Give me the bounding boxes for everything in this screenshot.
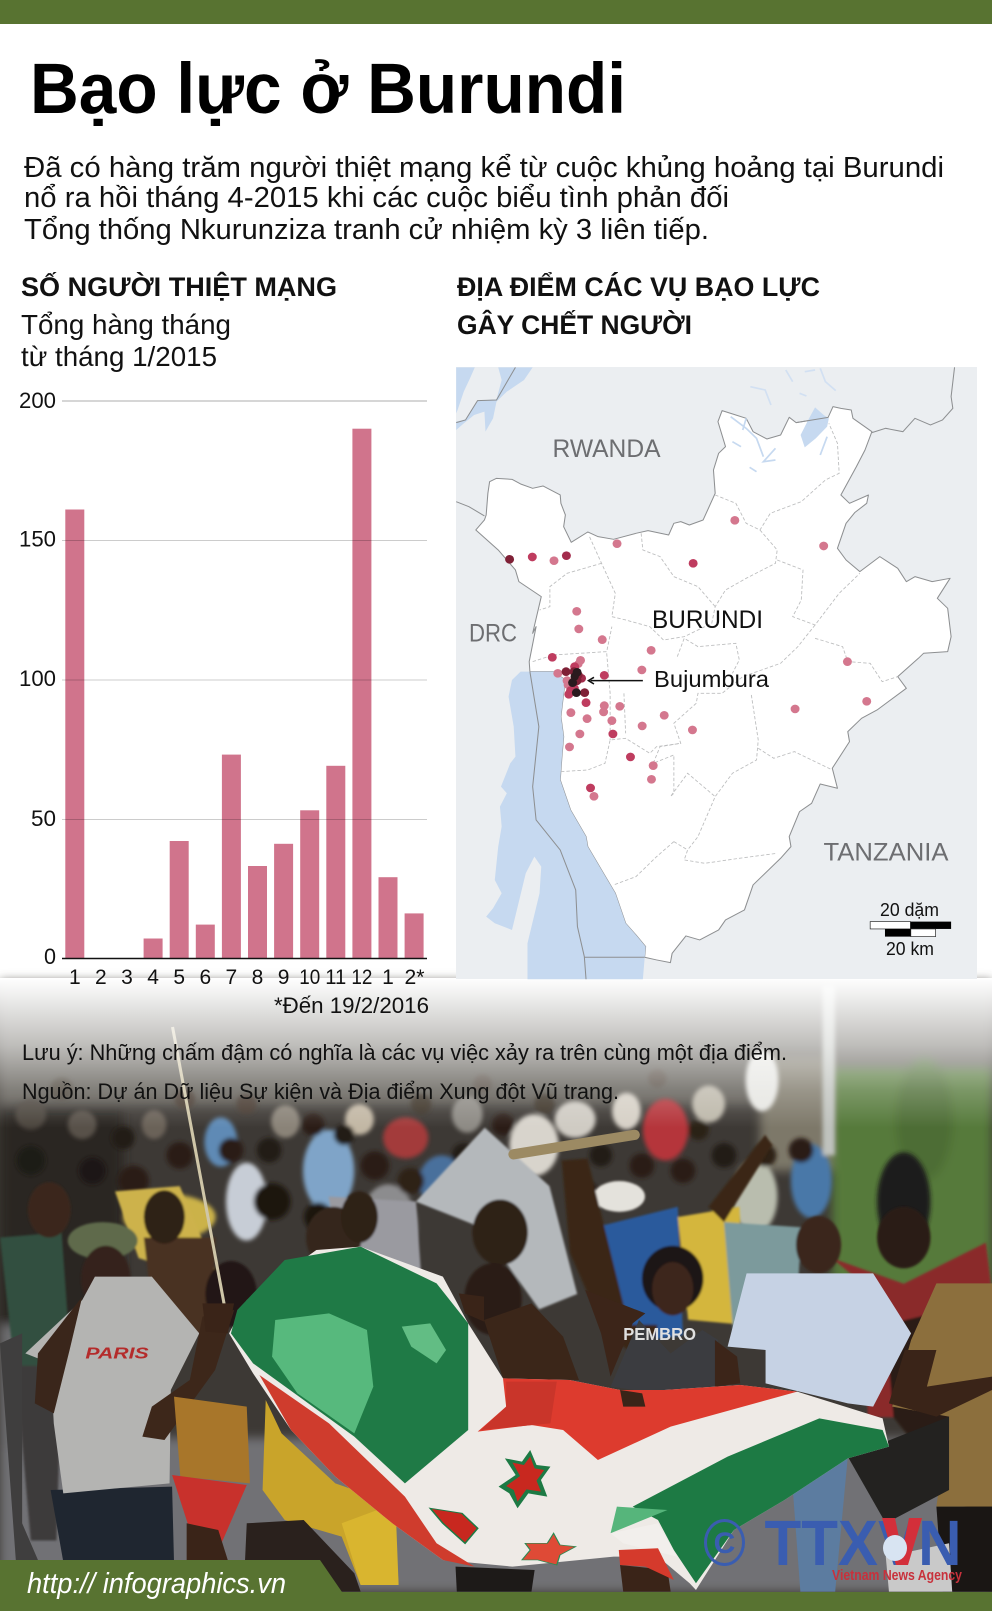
- map labels: [469, 435, 949, 959]
- title: Bạo lực ở Burundi: [30, 50, 626, 129]
- bar chart: monthly deaths: 12: [351, 966, 372, 989]
- bar chart: monthly deaths: 6: [199, 966, 211, 989]
- map labels: 20 km: [886, 938, 934, 959]
- bar chart: monthly deaths: 0: [44, 944, 56, 969]
- note and source: Nguồn: Dự án Dữ liệu Sự kiện và Địa điểm Xung đột Vũ trang.: [22, 1079, 619, 1104]
- bar chart: monthly deaths: 8: [252, 966, 263, 989]
- scale bar graphic: [870, 922, 951, 937]
- bar chart: monthly deaths: 7: [226, 966, 237, 989]
- bar chart: monthly deaths: 2: [95, 966, 107, 989]
- map labels: 20 dặm: [880, 899, 939, 920]
- top green bar: [0, 0, 992, 24]
- incident dots: [505, 516, 871, 801]
- footnote: date: *Đến 19/2/2016: [274, 993, 429, 1018]
- bar chart: monthly deaths: 3: [121, 966, 133, 989]
- map labels: RWANDA: [552, 435, 661, 463]
- bar chart: monthly deaths: 100: [19, 666, 56, 691]
- blurred crowd: [15, 986, 930, 1270]
- intro text: Đã có hàng trăm người thiệt mạng kể từ cuộc khủng hoảng tại Burundi: [24, 152, 944, 184]
- bar chart: monthly deaths: 5: [173, 966, 185, 989]
- bar chart: monthly deaths: 11: [325, 966, 346, 989]
- bar chart: monthly deaths: 50: [31, 806, 56, 831]
- shield and foreground crowd: [0, 1128, 992, 1540]
- bar chart: monthly deaths: 1: [69, 966, 81, 989]
- Burundi territory: [476, 407, 951, 963]
- bar chart: monthly deaths: 1: [382, 966, 394, 989]
- note and source: [22, 1040, 787, 1104]
- map labels: TANZANIA: [824, 838, 949, 866]
- white fade over photo top: [0, 978, 992, 1128]
- bar chart: monthly deaths: 150: [19, 526, 56, 552]
- note and source: Lưu ý: Những chấm đậm có nghĩa là các vụ việc xảy ra trên cùng một địa điểm.: [22, 1040, 787, 1065]
- foreground flag and runners: PEMBRO: [623, 1324, 696, 1344]
- heading: map: [457, 271, 820, 340]
- stick and branch: [173, 1027, 635, 1325]
- heading: map: GÂY CHẾT NGƯỜI: [457, 309, 692, 340]
- map panel: [456, 367, 977, 979]
- northern lake and rivers in Burundi: [801, 407, 829, 447]
- TTXVN logo: C: [714, 1527, 735, 1560]
- heading: death toll: SỐ NGƯỜI THIỆT MẠNG: [21, 270, 337, 302]
- bar chart: monthly deaths: 2*: [404, 966, 424, 989]
- bar chart: monthly deaths: [19, 388, 427, 989]
- foreground flag and runners: PARIS: [85, 1344, 149, 1362]
- map labels: DRC: [469, 620, 517, 648]
- northern streams outside Burundi: [750, 368, 836, 405]
- heading: map: ĐỊA ĐIỂM CÁC VỤ BẠO LỰC: [457, 271, 820, 302]
- foreground flag and runners: [0, 1247, 992, 1592]
- TTXVN logo: [706, 1507, 963, 1584]
- intro text: [24, 152, 944, 246]
- bar chart: monthly deaths: 9: [278, 966, 289, 989]
- website url: http:// infographics.vn: [27, 1568, 286, 1600]
- subheading: monthly total: Tổng hàng tháng: [21, 309, 231, 340]
- photo: protest crowd with Burundi flag: [0, 980, 992, 1592]
- international borders: [456, 367, 955, 979]
- bottom green bar with website tab: [0, 1560, 992, 1611]
- subheading: monthly total: [21, 309, 231, 372]
- intro text: Tổng thống Nkurunziza tranh cử nhiệm kỳ 3 liên tiếp.: [24, 214, 709, 246]
- intro text: nổ ra hồi tháng 4-2015 khi các cuộc biểu tình phản đối: [24, 182, 729, 214]
- arrow to Bujumbura: [588, 677, 643, 684]
- bar chart: monthly deaths: 4: [147, 966, 159, 989]
- map labels: Bujumbura: [654, 666, 769, 692]
- province boundaries: [533, 423, 898, 885]
- bar chart: monthly deaths: 10: [299, 966, 320, 989]
- bar chart: monthly deaths: 200: [19, 388, 56, 413]
- flag: [229, 1247, 889, 1590]
- map labels: BURUNDI: [652, 606, 763, 634]
- subheading: monthly total: từ tháng 1/2015: [21, 341, 217, 372]
- lake in the north-west corner: [456, 367, 533, 432]
- TTXVN logo: Vietnam News Agency: [832, 1567, 963, 1584]
- Lake Tanganyika: [486, 672, 646, 979]
- TTXVN logo: TTXVN: [764, 1507, 962, 1579]
